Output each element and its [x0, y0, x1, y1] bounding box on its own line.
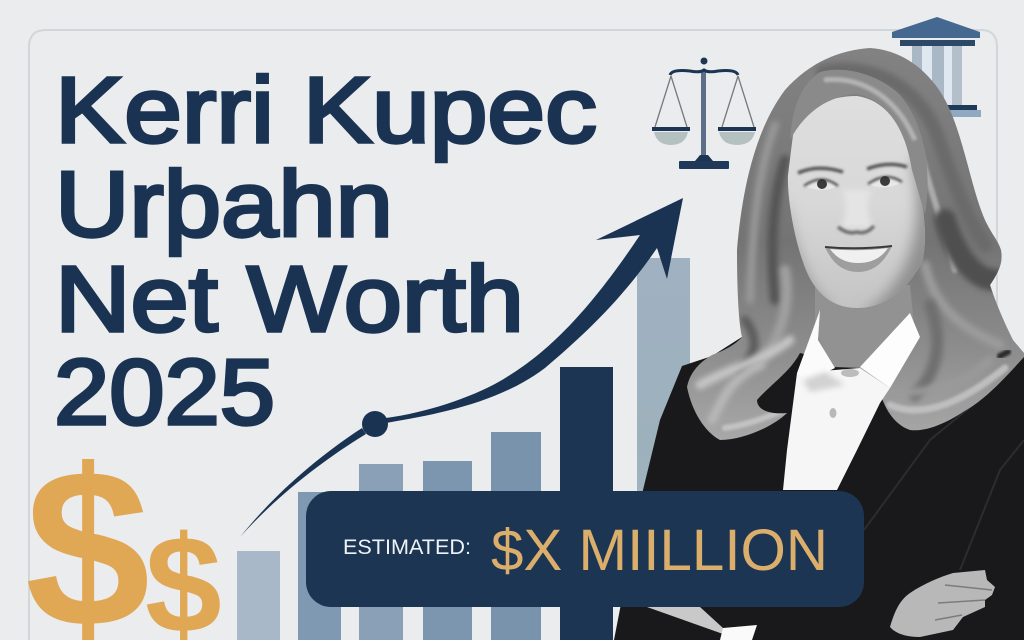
lower arm and cuff	[647, 607, 723, 634]
trend arrow	[240, 198, 683, 537]
mouth	[825, 246, 892, 272]
nose	[838, 226, 874, 233]
title: 2025	[54, 340, 275, 444]
hair mass	[687, 48, 1024, 440]
face	[788, 96, 925, 308]
blazer	[614, 335, 1024, 640]
hair strands	[700, 70, 1008, 428]
collar right	[860, 313, 920, 388]
shirt	[783, 368, 890, 490]
callout: estimated value	[306, 491, 864, 607]
eyes	[804, 176, 902, 190]
lapel shading	[864, 395, 1024, 570]
title	[54, 58, 597, 444]
face shading	[790, 156, 925, 308]
fingers	[935, 585, 992, 620]
eyebrows	[798, 164, 907, 173]
crossed hand	[890, 570, 995, 637]
icon: classical building	[892, 17, 981, 117]
collar fold shadow	[803, 372, 845, 392]
title: Urþahn	[55, 152, 393, 256]
portrait: woman in blazer	[614, 48, 1024, 640]
neck	[815, 285, 915, 368]
title: Net Worth	[55, 247, 524, 351]
label: ESTIMATED:	[343, 536, 471, 559]
icon: scales of justice	[652, 58, 756, 169]
shirt button	[830, 408, 836, 418]
parting highlight	[824, 79, 915, 140]
hair sweep over forehead	[790, 70, 928, 215]
bar chart	[237, 258, 690, 640]
collar left	[797, 310, 835, 382]
icon: dollar signs	[25, 430, 222, 640]
value: $X MIILLION	[491, 518, 828, 583]
top button	[841, 369, 859, 377]
title: Kerri Kupec	[55, 58, 597, 162]
